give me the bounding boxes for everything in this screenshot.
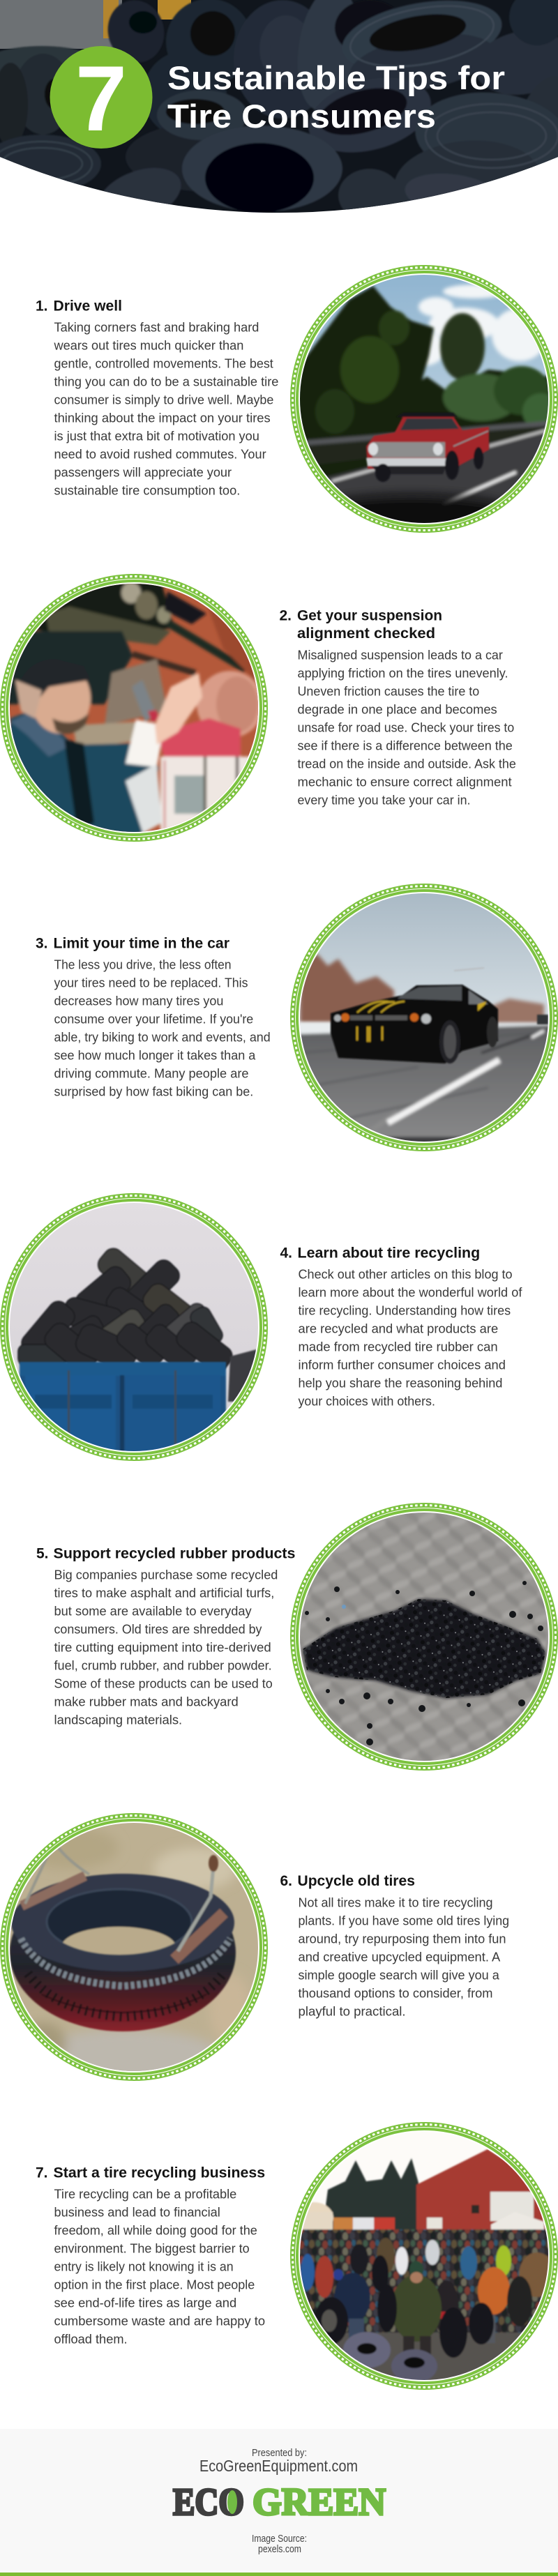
tip 1 photo: red convertible on road [293,268,558,544]
tip 3 photo: black muscle car [293,886,555,1154]
tip 6 body text: playful to practical. [299,2004,406,2019]
logo: Eco Green: GREEN [252,2480,386,2523]
tip 6 body text: and creative upcycled equipment. A [299,1950,501,1964]
tip 3: limit time in car [36,886,555,1154]
tip 3 body text [54,957,271,1099]
tip 3 body text: The less you drive, the less often [54,957,232,972]
tip 1 body text: gentle, controlled movements. The best [54,356,273,371]
tip 7 stitched ring [293,2124,555,2388]
tip 2 body text: tread on the inside and outside. Ask the [297,757,516,771]
tip 2 heading [279,607,442,642]
tip 4 body text: are recycled and what products are [299,1321,498,1336]
tip 6 body text: thousand options to consider, from [299,1986,492,2001]
logo: Eco Green: ECO [173,2480,244,2523]
tip 1 body text: thing you can do to be a sustainable tire [54,374,278,389]
tip 2 body text: unsafe for road use. Check your tires to [297,720,514,735]
tip 5 body text: Big companies purchase some recycled [54,1568,278,1582]
tip 5 body text: consumers. Old tires are shredded by [54,1622,262,1637]
tip 4 body text: help you share the reasoning behind [299,1376,502,1391]
tip 2 photo: mechanic under car [3,576,265,840]
tip 7 body text: freedom, all while doing good for the [54,2223,257,2238]
tip 1 body text: thinking about the impact on your tires [54,411,271,425]
tip 7 body text: entry is likely not knowing it is an [54,2259,234,2274]
logo leaf [227,2490,237,2514]
tip 5 body text: tire cutting equipment into tire-derived [54,1640,271,1655]
presented by text: Presented by: [252,2447,307,2459]
tip 6 body text: simple google search will give you a [299,1968,499,1983]
tip 3 heading: Limit your time in the car [53,935,229,951]
footer bottom bar [0,2573,558,2576]
tip 1 body text: consumer is simply to drive well. Maybe [54,393,273,407]
header number badge [50,46,152,151]
tip 1 stitched ring [293,268,555,530]
tip 5 heading: Support recycled rubber products [53,1545,296,1561]
tip 5 stitched ring [293,1505,555,1768]
tip 3 body text: consume over your lifetime. If you're [54,1012,253,1026]
image source credit [252,2533,307,2555]
tip 4 body text [299,1267,522,1409]
logo: Eco Green [173,2480,386,2523]
tip 6 photo: tire swing on grass [3,1816,265,2085]
tip 5 body text [54,1568,278,1727]
title: Sustainable Tips for [167,59,505,96]
tip 3 body text: surprised by how fast biking can be. [54,1084,253,1099]
tip 2 body text [297,648,516,808]
tip 2 body text: every time you take your car in. [297,793,470,808]
tip 4 body text: inform further consumer choices and [299,1358,506,1372]
tip 2 body text: mechanic to ensure correct alignment [297,775,512,789]
tip 1 body text: Taking corners fast and braking hard [54,320,259,335]
tip 6: upcycle old tires [3,1816,509,2085]
tip 7 heading: 7. [36,2165,48,2181]
tip 4 body text: your choices with others. [299,1394,435,1409]
tip 6 stitched ring [3,1816,265,2078]
tip 6 body text: around, try repurposing them into fun [299,1932,506,1946]
tip 5: recycled rubber products [36,1505,555,1768]
tip 4 body text: made from recycled tire rubber can [299,1340,498,1354]
tip 1 body text: passengers will appreciate your [54,465,232,480]
tip 3 stitched ring [293,886,555,1149]
tip 4 photo: tires on blue container [3,1195,265,1460]
tip 4 body text: Check out other articles on this blog to [299,1267,513,1282]
tip 7 body text: see end-of-life tires as large and [54,2296,236,2310]
tip 5 body text: make rubber mats and backyard [54,1695,239,1709]
tip 6 heading: Upcycle old tires [297,1873,415,1889]
tip 5 photo: crumb rubber pile [293,1505,555,1768]
footer panel [0,2429,558,2576]
tip 6 heading: 6. [280,1873,292,1889]
tip 7 body text: offload them. [54,2332,128,2347]
tip 7 body text: Tire recycling can be a profitable [54,2187,236,2202]
tip 2 stitched ring [3,576,265,840]
tip 7 body text: business and lead to financial [54,2205,220,2220]
tip 3 body text: driving commute. Many people are [54,1066,248,1081]
tip 2 heading: 2. [279,607,292,623]
tip 4 body text: learn more about the wonderful world of [299,1285,522,1300]
tip 7 body text [54,2187,265,2347]
tip 7 photo: crowd at tire recycling event [293,2124,555,2392]
tip 5 heading: 5. [36,1545,49,1561]
title [167,59,505,135]
tip 7: start a recycling business [36,2124,555,2392]
tip 1 body text: sustainable tire consumption too. [54,483,240,498]
tip 5 body text: fuel, crumb rubber, and rubber powder. [54,1658,272,1673]
image source credit: Image Source: [252,2533,307,2545]
tip 6 body text [299,1895,509,2019]
tip 4 body text: tire recycling. Understanding how tires [299,1303,511,1318]
tip 2 heading: alignment checked [297,626,435,642]
tip 1 body text: wears out tires much quicker than [54,338,243,353]
tip 3 body text: able, try biking to work and events, and [54,1030,271,1045]
tip 1 heading: 1. [36,298,48,315]
tip 5 body text: tires to make asphalt and artificial turfs, [54,1586,274,1600]
tip 4 stitched ring [3,1195,265,1459]
tip 2 body text: see if there is a difference between the [297,738,513,753]
tip 3 heading: 3. [36,935,48,951]
presented by text [199,2447,358,2475]
tip 1 body text: is just that extra bit of motivation you [54,429,259,444]
tip 5 body text: Some of these products can be used to [54,1676,273,1691]
tip 3 body text: decreases how many tires you [54,994,223,1008]
presented by text: EcoGreenEquipment.com [199,2457,358,2475]
header number badge: 7 [75,47,127,151]
tip 3 body text: see how much longer it takes than a [54,1048,256,1063]
tip 5 body text: landscaping materials. [54,1713,182,1727]
tip 6 body text: Not all tires make it to tire recycling [299,1895,492,1910]
tip 5 body text: but some are available to everyday [54,1604,252,1619]
tip 2: suspension alignment [3,576,516,840]
tip 2 body text: degrade in one place and becomes [297,702,497,717]
tip 7 body text: environment. The biggest barrier to [54,2241,250,2256]
tip 7 body text: option in the first place. Most people [54,2278,255,2292]
tip 2 heading: Get your suspension [297,607,442,623]
image source credit: pexels.com [258,2543,301,2555]
tip 2 body text: Misaligned suspension leads to a car [297,648,503,662]
tip 7 body text: cumbersome waste and are happy to [54,2314,265,2328]
tip 6 body text: plants. If you have some old tires lying [299,1914,509,1928]
tip 2 body text: applying friction on the tires unevenly. [297,666,508,681]
tip 2 body text: Uneven friction causes the tire to [297,684,479,699]
tip 4 heading: 4. [280,1245,292,1261]
tip 1 body text: need to avoid rushed commutes. Your [54,447,266,462]
tip 3 body text: your tires need to be replaced. This [54,976,248,990]
title: Tire Consumers [167,98,436,135]
tip 7 heading: Start a tire recycling business [53,2165,265,2181]
tip 4 heading: Learn about tire recycling [297,1245,480,1261]
header: tire pile photo with curved bottom [0,0,558,233]
tip 1 heading: Drive well [53,298,122,315]
tip 1 body text [54,320,278,498]
tip 1: drive well [36,268,558,544]
tip 4: learn about recycling [3,1195,522,1460]
